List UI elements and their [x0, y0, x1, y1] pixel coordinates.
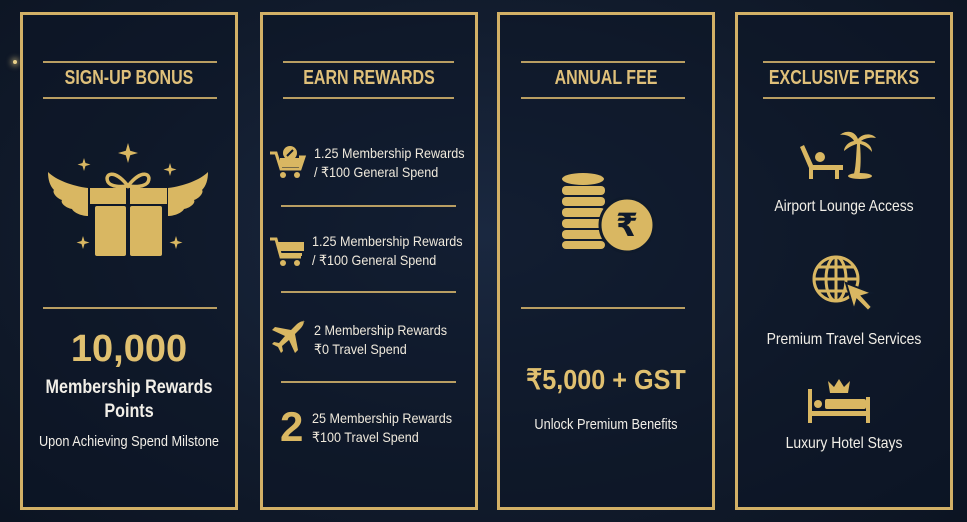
panel: earn rewards: 25 Membership Rewards — [312, 410, 452, 426]
panel: earn rewards — [260, 12, 478, 510]
row 4 — [280, 403, 452, 450]
text: airport lounge access: Airport Lounge Access — [774, 198, 914, 215]
panel: earn rewards: / ₹100 General Spend — [314, 164, 438, 180]
text: membership rewards points: Points — [104, 401, 154, 422]
row 1 — [270, 145, 465, 180]
panel: earn rewards: 1.25 Membership Rewards — [312, 233, 463, 249]
panel: earn rewards: 2 Membership Rewards — [314, 322, 447, 338]
panel: exclusive perks — [735, 12, 953, 510]
icon: cart — [270, 238, 304, 266]
text: membership rewards points: Membership Rewards — [46, 377, 212, 398]
panel: earn rewards: / ₹100 General Spend — [312, 252, 436, 268]
row 3 — [272, 320, 447, 357]
big digit 2: 2 — [280, 403, 303, 450]
icon: plane — [272, 320, 305, 353]
icon: cart with coin — [270, 146, 306, 178]
text: premium travel services: Premium Travel Services — [767, 331, 921, 348]
heading: exclusive perks: EXCLUSIVE PERKS — [769, 67, 919, 89]
icon: coins with rupee: ₹ — [616, 207, 638, 243]
heading: sign-up bonus: SIGN-UP BONUS — [65, 67, 193, 89]
panel: earn rewards: ₹0 Travel Spend — [314, 341, 407, 357]
panel: earn rewards: 1.25 Membership Rewards — [314, 145, 465, 161]
heading: earn rewards: EARN REWARDS — [303, 67, 435, 89]
icon: globe with cursor — [812, 256, 871, 310]
panel: sign-up bonus — [20, 12, 238, 510]
panel: earn rewards: ₹100 Travel Spend — [312, 429, 419, 445]
text: luxury hotel stays: Luxury Hotel Stays — [786, 435, 902, 452]
icon: lounge chair and palm — [800, 132, 876, 179]
text: membership rewards points — [46, 377, 212, 422]
decorative sparkle — [13, 60, 17, 64]
fee amount: ₹5,000 + GST — [526, 364, 686, 395]
icon: winged gift — [48, 143, 208, 256]
icon: coins with rupee — [562, 173, 652, 250]
row 2 — [270, 233, 463, 268]
text: milestone: Upon Achieving Spend Milstone — [39, 433, 219, 450]
icon: bed with crown — [808, 379, 870, 423]
text: unlock premium benefits: Unlock Premium Benefits — [534, 416, 678, 433]
heading: annual fee: ANNUAL FEE — [555, 67, 657, 89]
big number: 10,000 — [71, 328, 187, 370]
panel: annual fee — [497, 12, 715, 510]
